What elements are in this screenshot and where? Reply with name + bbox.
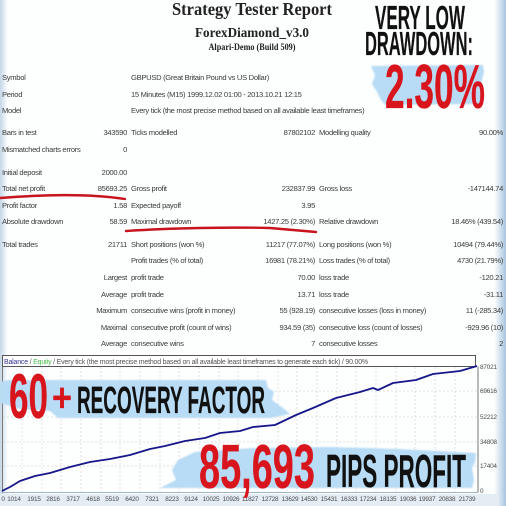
report table: 16981 (78.21%) [265,256,316,265]
x axis labels: 10025 [203,496,220,503]
callout: recovery factor: RECOVERY FACTOR [77,380,265,422]
report table: 13.71 [297,290,315,299]
x axis labels: 18135 [380,496,397,503]
report title: Alpari-Demo (Build 509) [208,42,296,53]
x axis labels: 8223 [165,496,179,503]
report table: -120.21 [479,273,503,282]
report table: Profit factor [2,201,38,210]
y axis labels: 52212 [480,414,497,421]
report table: profit trade [131,290,164,299]
report table: 58.59 [109,217,127,226]
report table: 1427.25 (2.30%) [263,217,316,226]
report table: consecutive wins [131,339,184,348]
x axis labels: 15431 [321,496,338,503]
x axis labels: 2816 [46,496,60,503]
x axis labels: 9124 [184,496,198,503]
red underline: total net profit [0,195,125,199]
report table: 4730 (21.79%) [457,256,504,265]
x axis labels: 1014 [7,496,21,503]
x axis labels: 19036 [400,496,417,503]
report table: loss trade [319,273,349,282]
x axis labels: 3717 [66,496,80,503]
report table: 2000.00 [102,168,127,177]
report table: Mismatched charts errors [2,145,81,154]
report table: 15 Minutes (M15) 1999.12.02 01:00 - 2013.10.21 12:15 [131,90,302,99]
x axis labels: 21739 [459,496,476,503]
x axis labels: 1915 [27,496,41,503]
report table: 70.00 [297,273,315,282]
report table: profit trade [131,273,164,282]
report table: loss trade [319,290,349,299]
chart legend bar: Balance / Equity / Every tick (the most precise method based on all available least timeframes to generate each tick) / 90.00% [4,359,368,366]
report table: Maximum [96,306,127,315]
x axis labels: 20838 [439,496,456,503]
report table: Model [2,106,22,115]
x axis labels: 19937 [419,496,436,503]
report table: 232837.99 [282,184,315,193]
report table: Ticks modelled [131,128,177,137]
report table: Maximal [101,323,128,332]
report table: Every tick (the most precise method based on all available least timeframes) [131,106,365,115]
x axis labels: 6420 [125,496,139,503]
y axis labels: 34808 [480,439,497,446]
report table: 10494 (79.44%) [453,240,504,249]
report table: Initial deposit [2,168,43,177]
chart plot frame and grid [2,366,478,492]
report table: Symbol [2,73,26,82]
report table: Absolute drawdown [2,217,63,226]
report table: Bars in test [2,128,38,137]
report table: Loss trades (% of total) [319,256,391,265]
report table: 7 [311,339,315,348]
x axis labels: 0 [1,496,5,503]
report table: Period [2,90,22,99]
x axis labels [1,496,476,503]
x axis labels: 16333 [341,496,358,503]
report table: 934.59 (35) [279,323,316,332]
report table: -929.96 (10) [465,323,504,332]
report table: consecutive wins (profit in money) [131,306,236,315]
report table: 55 (928.19) [279,306,316,315]
report table: 2 [499,339,503,348]
y axis labels: 0 [480,488,484,495]
y axis labels: 87021 [480,364,497,371]
x axis labels: 13629 [282,496,299,503]
report table [2,73,504,348]
callout: recovery factor: + [52,376,72,420]
report table: 0 [123,145,127,154]
report table: Relative drawdown [319,217,378,226]
report table: 11 (-285.34) [466,306,504,315]
x axis labels: 10926 [223,496,240,503]
report table: Short positions (won %) [131,240,205,249]
report table: consecutive loss (count of losses) [319,323,423,332]
x axis labels: 17234 [360,496,377,503]
red underline: maximal drawdown [126,228,316,232]
report table: -31.11 [484,290,503,299]
report table: Average [101,339,127,348]
report table: Total net profit [2,184,46,193]
x axis labels: 4618 [86,496,100,503]
report table: -147144.74 [468,184,503,193]
report table: Largest [104,273,128,282]
report table: GBPUSD (Great Britain Pound vs US Dollar) [131,73,270,82]
balance chart [1,356,497,503]
report table: 11217 (77.07%) [266,240,316,249]
report table: consecutive losses [319,339,378,348]
balance curve [2,366,477,491]
report table: 85693.25 [98,184,127,193]
report table: 343590 [103,128,127,137]
report table: Modelling quality [319,128,371,137]
callout: recovery factor [0,362,290,432]
callout: pips profit: 85,693 [199,433,315,502]
x axis labels: 5519 [105,496,119,503]
report table: 18.46% (439.54) [451,217,504,226]
x axis labels: 14530 [301,496,318,503]
callout: very low drawdown [365,0,485,122]
report table: 3.95 [301,201,315,210]
x axis labels: 11827 [242,496,259,503]
x axis labels: 7321 [145,496,159,503]
report table: 21711 [108,240,127,249]
y axis labels [480,364,497,495]
report table: consecutive losses (loss in money) [319,306,427,315]
report table: Maximal drawdown [131,217,191,226]
report table: Average [101,290,127,299]
report table: Profit trades (% of total) [131,256,204,265]
report table: 87802102 [284,128,315,137]
report table: Long positions (won %) [319,240,392,249]
report table: consecutive profit (count of wins) [131,323,232,332]
report table: 1.58 [113,201,127,210]
callout: pips profit [160,433,476,502]
callout: recovery factor: 60 [9,362,48,432]
report table: Gross loss [319,184,352,193]
report table: Total trades [2,240,38,249]
y axis labels: 69616 [480,388,497,395]
report table: Gross profit [131,184,168,193]
y axis labels: 17404 [480,463,497,470]
chart legend bar [2,356,476,366]
report title [172,0,332,53]
x axis labels: 12728 [262,496,279,503]
report title: ForexDiamond_v3.0 [195,26,309,41]
report table: 90.00% [479,128,504,137]
report table: Expected payoff [131,201,182,210]
